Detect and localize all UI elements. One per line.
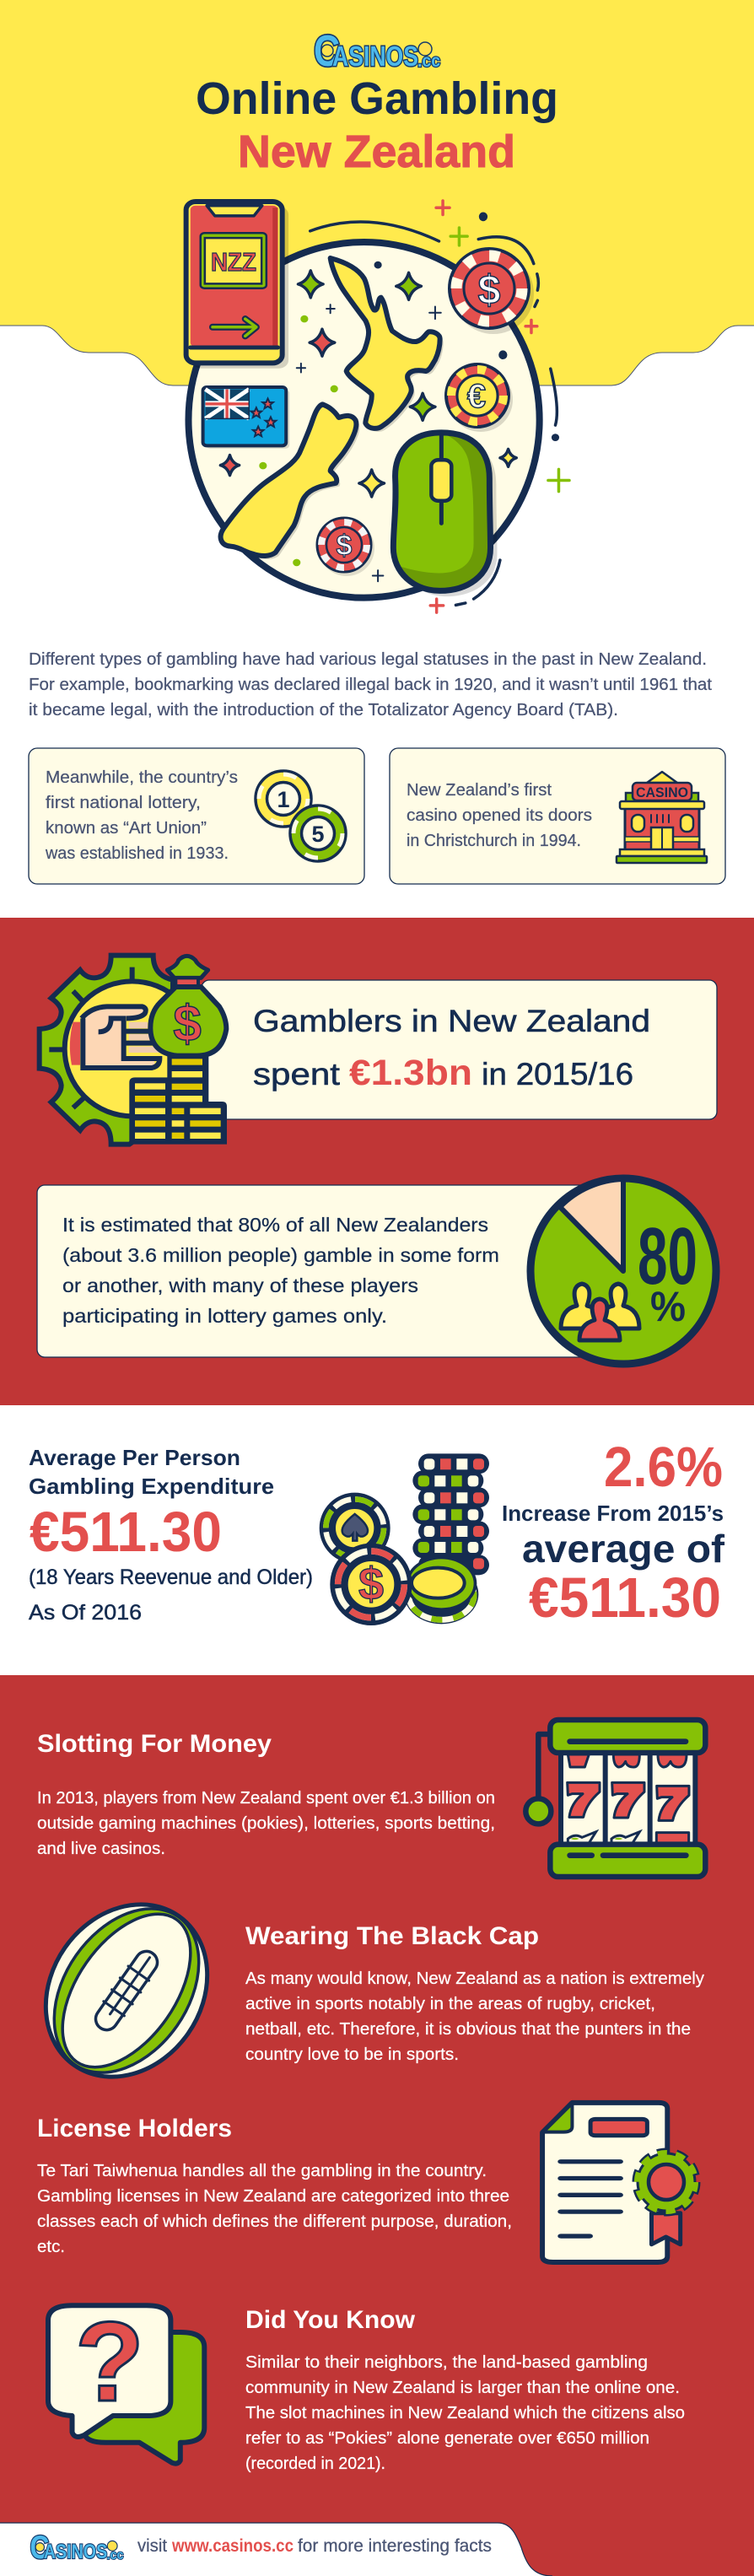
icon: stacked chips: $ (358, 1559, 384, 1609)
right stat: Increase From 2015’s (502, 1501, 724, 1526)
icon: license certificate (542, 2103, 695, 2262)
casino text (407, 781, 592, 850)
small dollar chip: $ (337, 530, 353, 562)
icon: people (561, 1284, 639, 1340)
lottery text: first national lottery, (46, 794, 201, 812)
icon: slot machine (525, 1720, 705, 1877)
fact: wearing the black cap: netball, etc. Therefore, it is obvious that the punters in the (245, 2020, 691, 2039)
fact: license holders: Te Tari Taiwhenua handles all the gambling in the country. (37, 2162, 487, 2180)
callout: 80 percent (37, 1185, 594, 1357)
casino text: in Christchurch in 1994. (407, 832, 581, 850)
intro text: it became legal, with the introduction of the Totalizator Agency Board (TAB). (29, 701, 618, 719)
icon: rugby ball (13, 1873, 240, 2109)
icon: lottery balls (256, 771, 346, 861)
fact: did you know: The slot machines in New Zealand which the citizens also (245, 2404, 685, 2422)
footer logo (30, 2530, 124, 2566)
dollar chip (450, 249, 534, 334)
icon: lottery balls: 1 (277, 787, 290, 812)
fact: slotting for money: Slotting For Money (37, 1730, 272, 1758)
fact: license holders: License Holders (37, 2115, 232, 2142)
north island (331, 258, 444, 432)
left stat: €511.30 (30, 1501, 222, 1564)
callout: gamblers spent: Gamblers in New Zealand (253, 1004, 650, 1038)
callout: gamblers spent: in 2015/16 (482, 1057, 633, 1091)
intro text: For example, bookmarking was declared illegal back in 1920, and it wasn’t until 1961 that (29, 676, 712, 694)
sparkles (220, 271, 516, 497)
fact: license holders: etc. (37, 2238, 65, 2256)
left stat: (18 Years Reevenue and Older) (29, 1566, 313, 1589)
title (196, 73, 558, 177)
left stat: Average Per Person (29, 1445, 240, 1470)
callout: 80 percent: (about 3.6 million people) gamble in some form (62, 1244, 499, 1266)
panel: national lottery (29, 748, 364, 884)
logo: C (314, 27, 340, 76)
footer text (137, 2536, 492, 2556)
panel: yellow header wave (0, 0, 754, 385)
euro chip: € (467, 378, 486, 415)
fact: wearing the black cap: Wearing The Black Cap (245, 1922, 539, 1950)
euro chip (446, 364, 513, 432)
callout: 80 percent: or another, with many of these players (62, 1275, 418, 1296)
fact: did you know: Similar to their neighbors, the land-based gambling (245, 2353, 648, 2372)
right stat (502, 1436, 725, 1630)
south island (221, 404, 359, 559)
dots (374, 213, 559, 441)
fact: license holders: Gambling licenses in New Zealand are categorized into three (37, 2187, 509, 2206)
callout: 80 percent: participating in lottery games only. (62, 1305, 387, 1327)
chart: 80 percent pie: % (650, 1283, 686, 1330)
fact: license holders (37, 2115, 512, 2256)
icon: question bubbles (48, 2299, 204, 2464)
lottery text: was established in 1933. (45, 844, 229, 863)
callout: gamblers spent: spent (253, 1057, 341, 1091)
dollar chip: $ (478, 268, 501, 313)
left stat: Gambling Expenditure (29, 1474, 274, 1499)
big circle (188, 242, 540, 598)
panel: red facts section (0, 1675, 754, 2576)
icon: gear with hand and money bag (40, 956, 227, 1145)
chart: 80 percent pie: 80 (638, 1211, 697, 1301)
footer (0, 2523, 552, 2576)
mouse (400, 439, 497, 596)
fact: slotting for money: and live casinos. (37, 1840, 165, 1858)
icon: gear with hand and money bag: $ (173, 995, 202, 1052)
panel: red statistics section (0, 918, 754, 1405)
lottery text (45, 768, 238, 863)
plus signs (297, 304, 441, 581)
fact: did you know: (recorded in 2021). (245, 2455, 385, 2473)
panel: average expenditure (29, 1436, 725, 1630)
footer logo: .cc (107, 2548, 124, 2563)
small dollar chip (317, 518, 374, 576)
callout: gamblers spent: €1.3bn (349, 1053, 472, 1093)
lottery text: Meanwhile, the country’s (46, 768, 238, 787)
right stat: average of (522, 1527, 725, 1571)
panel: first casino (390, 748, 725, 884)
fact: wearing the black cap: active in sports notably in the areas of rugby, cricket, (245, 1995, 655, 2013)
callout: 80 percent: It is estimated that 80% of all New Zealanders (62, 1214, 488, 1236)
fact: wearing the black cap (245, 1922, 704, 2064)
logo: .cc (417, 51, 440, 71)
intro text: Different types of gambling have had various legal statuses in the past in New Zealand. (29, 650, 707, 669)
fact: did you know: refer to as “Pokies” alone generate over €650 million (245, 2429, 649, 2448)
footer text: for more interesting facts (298, 2536, 492, 2556)
footer logo: ASINOS (44, 2541, 107, 2563)
footer text: www.casinos.cc (171, 2536, 294, 2556)
icon: stacked chips (321, 1453, 489, 1624)
title: Online Gambling (196, 73, 558, 124)
logo (314, 27, 440, 76)
left stat: As Of 2016 (29, 1601, 142, 1625)
callout: gamblers spent (202, 980, 717, 1119)
fact: wearing the black cap: country love to be in sports. (245, 2045, 459, 2064)
lottery text: known as “Art Union” (46, 819, 207, 838)
chart: 80 percent pie (530, 1178, 716, 1364)
hero illustration (186, 201, 569, 612)
fact: wearing the black cap: As many would know, New Zealand as a nation is extremely (245, 1970, 704, 1988)
fact: slotting for money: outside gaming machines (pokies), lotteries, sports betting, (37, 1814, 495, 1833)
icon: question bubbles: ? (75, 2299, 144, 2425)
phone (191, 207, 288, 369)
casino text: casino opened its doors (407, 806, 592, 825)
fact: license holders: classes each of which defines the different purpose, duration, (37, 2212, 512, 2231)
title: New Zealand (238, 127, 515, 177)
casino text: New Zealand’s first (407, 781, 552, 800)
right stat: 2.6% (604, 1436, 723, 1499)
flag (207, 390, 289, 449)
left stat (29, 1445, 313, 1625)
right stat: €511.30 (529, 1566, 721, 1630)
phone sign: NZZ (211, 247, 256, 277)
fact: did you know: Did You Know (245, 2306, 416, 2334)
icon: casino building: CASINO (636, 784, 688, 800)
fact: slotting for money (37, 1730, 495, 1858)
footer logo: C (30, 2530, 49, 2566)
fact: did you know: community in New Zealand is larger than the online one. (245, 2379, 680, 2397)
icon: casino building (617, 772, 707, 863)
orbit arcs (310, 222, 557, 605)
fact: slotting for money: In 2013, players from New Zealand spent over €1.3 billion on (37, 1789, 495, 1808)
fact: did you know (245, 2306, 685, 2473)
footer text: visit (137, 2536, 167, 2556)
intro text (29, 650, 712, 719)
icon: lottery balls: 5 (311, 822, 325, 847)
logo: ASINOS (332, 40, 418, 72)
